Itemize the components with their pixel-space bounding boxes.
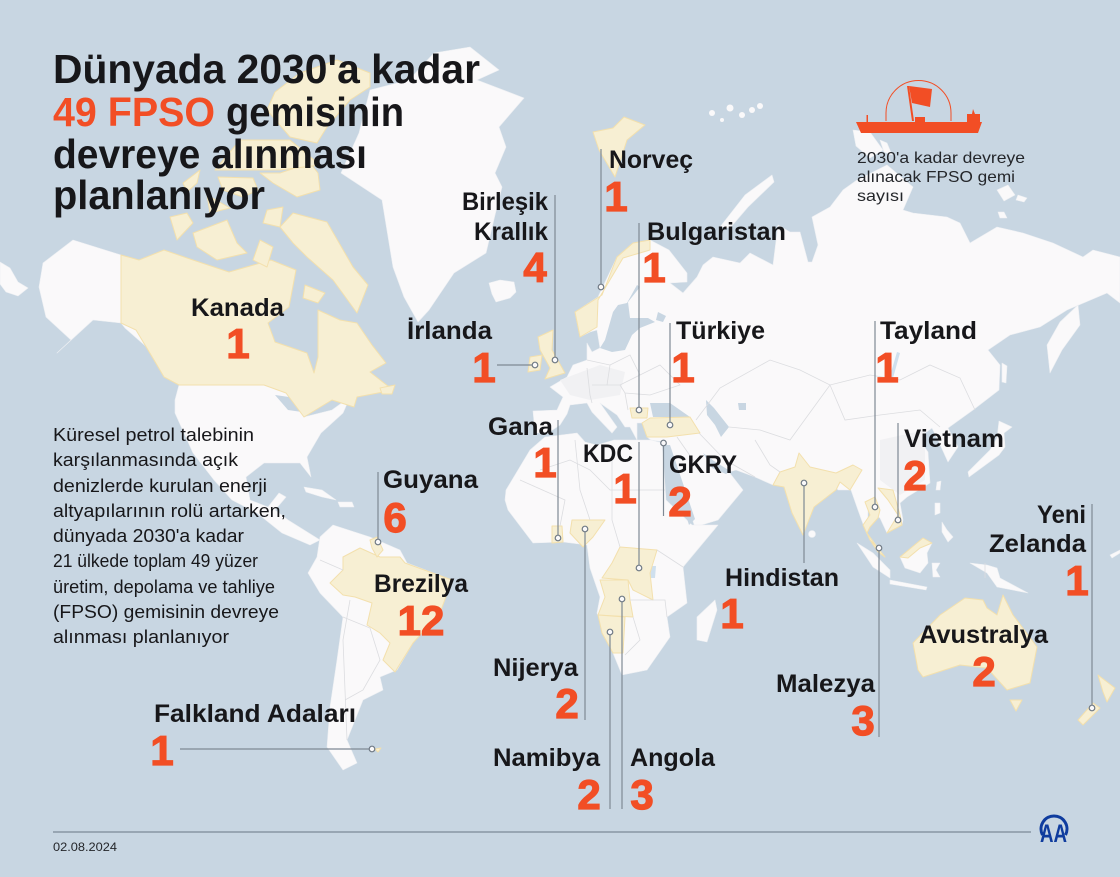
callout: Namibya <box>493 629 613 818</box>
callout: Avustralya: 2 <box>972 648 996 695</box>
callout: Guyana: 6 <box>383 494 407 541</box>
land: United States, Mexico and Central America <box>175 385 350 545</box>
callout: Bulgaristan: 1 <box>642 244 666 291</box>
body text: 21 ülkede toplam 49 yüzer <box>53 551 258 571</box>
callout: Norveç: Norveç <box>609 146 693 174</box>
callout: Birleşik Krallık <box>462 188 558 363</box>
highlighted country: Bulgaria <box>630 408 648 418</box>
legend caption: 2030'a kadar devreye <box>857 150 1025 167</box>
callout: GKRY: 2 <box>668 478 692 525</box>
callout: KDC <box>583 440 642 571</box>
highlighted country: United Kingdom <box>538 330 565 379</box>
callout: Gana <box>488 413 561 541</box>
callout: GKRY: GKRY <box>669 451 737 479</box>
callout: Yeni Zelanda: 1 <box>1065 557 1089 604</box>
callout: İrlanda <box>407 317 538 391</box>
callout: Türkiye: Türkiye <box>676 317 765 345</box>
callout: Angola <box>619 596 716 818</box>
highlighted country: Angola <box>598 580 633 617</box>
callout: Namibya: Namibya <box>493 744 601 772</box>
highlighted country: Australia <box>913 595 1037 711</box>
callout: Kanada: Kanada <box>191 294 285 322</box>
icon: FPSO ship with flag <box>856 80 982 133</box>
legend caption: alınacak FPSO gemi <box>857 169 1015 186</box>
callout: Birleşik Krallık: Krallık <box>474 218 548 246</box>
callout: Tayland <box>872 317 977 510</box>
callout: Bulgaristan: Bulgaristan <box>647 218 786 246</box>
land: Kamchatka <box>1047 305 1080 373</box>
callout: Vietnam: 2 <box>903 452 927 499</box>
land: Caribbean islands <box>304 487 354 507</box>
land: Sakhalin and Japan <box>936 363 1012 490</box>
body text: karşılanmasında açık <box>53 450 239 470</box>
callout: Türkiye <box>667 317 765 428</box>
callout: Nijerya: Nijerya <box>493 654 579 682</box>
country borders <box>320 355 985 740</box>
callout: Nijerya: 2 <box>555 680 579 727</box>
highlighted country: Norway and Svalbard <box>575 117 650 337</box>
callout: Falkland Adaları <box>150 700 375 774</box>
callout: Hindistan <box>720 480 839 637</box>
highlighted country: Nigeria <box>570 520 605 547</box>
callout: Brezilya <box>374 570 469 644</box>
callout: Malezya: Malezya <box>776 670 876 698</box>
land: Alaska <box>39 240 164 377</box>
highlighted country: DR Congo <box>602 547 657 600</box>
callout: Avustralya <box>919 621 1049 695</box>
callout: KDC: 1 <box>613 465 637 512</box>
highlighted country: Ghana <box>552 526 563 543</box>
callout: Falkland Adaları: 1 <box>150 727 174 774</box>
highlighted country: Falkland Islands <box>375 748 381 752</box>
callout: Bulgaristan <box>636 218 786 413</box>
highlighted country: Canada <box>121 60 395 417</box>
footer rule <box>53 831 1031 833</box>
body text: (FPSO) gemisinin devreye <box>53 602 279 622</box>
title: devreye alınması <box>53 131 367 177</box>
callout: Malezya <box>776 545 882 744</box>
title: planlanıyor <box>53 172 265 218</box>
callout: Tayland: 1 <box>875 344 899 391</box>
highlighted country: Ireland <box>528 355 542 372</box>
callout: Guyana: Guyana <box>383 466 479 494</box>
inland seas and lakes <box>275 285 900 578</box>
callout: Türkiye: 1 <box>671 344 695 391</box>
callout: Namibya: 2 <box>577 771 601 818</box>
legend: FPSO ship icon and caption <box>856 80 1025 205</box>
callout: GKRY <box>661 440 737 525</box>
land: Africa <box>505 433 718 675</box>
highlighted country: Vietnam <box>878 488 902 533</box>
title: 49 FPSO <box>53 89 215 135</box>
callout: Gana: Gana <box>488 413 554 441</box>
land: South America <box>308 525 452 770</box>
logo: Anadolu Agency <box>1040 816 1067 848</box>
logo: Anadolu Agency: AA <box>1040 820 1067 848</box>
highlighted country: Thailand <box>863 497 880 547</box>
land: Eurasia <box>533 165 1120 557</box>
highlighted country: India <box>773 453 862 535</box>
land: Arctic islands of Russia <box>720 130 1027 228</box>
land: Madagascar <box>697 600 717 642</box>
callout: Norveç: 1 <box>604 173 628 220</box>
land: Franz Josef islands <box>709 103 763 122</box>
callout: Hindistan: Hindistan <box>725 564 839 592</box>
highlighted country: New Zealand <box>1078 675 1115 725</box>
callout: Brezilya: 12 <box>398 597 444 644</box>
callout: İrlanda: İrlanda <box>407 317 493 345</box>
callout: Brezilya: Brezilya <box>374 570 469 598</box>
highlighted country: Malaysia <box>870 538 932 558</box>
land: Southeast Asia and Pacific islands <box>808 503 1120 593</box>
callout: Birleşik Krallık: Birleşik <box>462 188 548 216</box>
legend caption: sayısı <box>857 188 904 205</box>
highlighted country: Türkiye <box>642 417 700 437</box>
body text: denizlerde kurulan enerji <box>53 476 267 496</box>
body text: dünyada 2030'a kadar <box>53 526 244 546</box>
legend caption <box>857 150 1025 205</box>
callout: İrlanda: 1 <box>472 344 496 391</box>
callout: Malezya: 3 <box>851 697 875 744</box>
callout: Angola: 3 <box>630 771 654 818</box>
callout: Yeni Zelanda: Zelanda <box>989 530 1087 558</box>
callout: Hindistan: 1 <box>720 590 744 637</box>
callout: Norveç <box>598 146 693 290</box>
callout: Yeni Zelanda: Yeni <box>1037 501 1086 529</box>
body text: Küresel petrol talebinin <box>53 425 254 445</box>
callout: Birleşik Krallık: 4 <box>523 244 547 291</box>
body text: üretim, depolama ve tahliye <box>53 577 275 597</box>
callout: KDC: KDC <box>583 440 633 468</box>
highlighted country: Namibia <box>598 615 625 653</box>
callout: Vietnam <box>895 423 1004 523</box>
date: 02.08.2024 <box>53 840 117 854</box>
callout: Falkland Adaları: Falkland Adaları <box>154 700 356 728</box>
callout: Tayland: Tayland <box>880 317 977 345</box>
body text <box>53 425 286 647</box>
land: Chukotka edge <box>0 262 28 296</box>
callout: Vietnam: Vietnam <box>904 425 1004 453</box>
land: Greenland <box>341 47 524 322</box>
callout: Kanada <box>191 294 285 367</box>
highlighted country: Brazil <box>330 548 452 672</box>
body text: altyapılarının rolü artarken, <box>53 501 286 521</box>
callout: Angola: Angola <box>630 744 716 772</box>
title: gemisinin <box>226 89 404 135</box>
callout: Gana: 1 <box>533 439 557 486</box>
urban tint: Europe and East Asia <box>560 365 925 495</box>
callout: Kanada: 1 <box>226 320 250 367</box>
title <box>53 46 480 218</box>
highlighted country: Guyana <box>370 537 383 557</box>
callout: Avustralya: Avustralya <box>919 621 1049 649</box>
callout: Nijerya <box>493 526 588 727</box>
callout: Yeni Zelanda <box>989 501 1095 711</box>
body text: alınması planlanıyor <box>53 627 229 647</box>
land: Iceland <box>489 280 516 302</box>
title: Dünyada 2030'a kadar <box>53 46 480 92</box>
callout: Guyana <box>375 466 479 545</box>
